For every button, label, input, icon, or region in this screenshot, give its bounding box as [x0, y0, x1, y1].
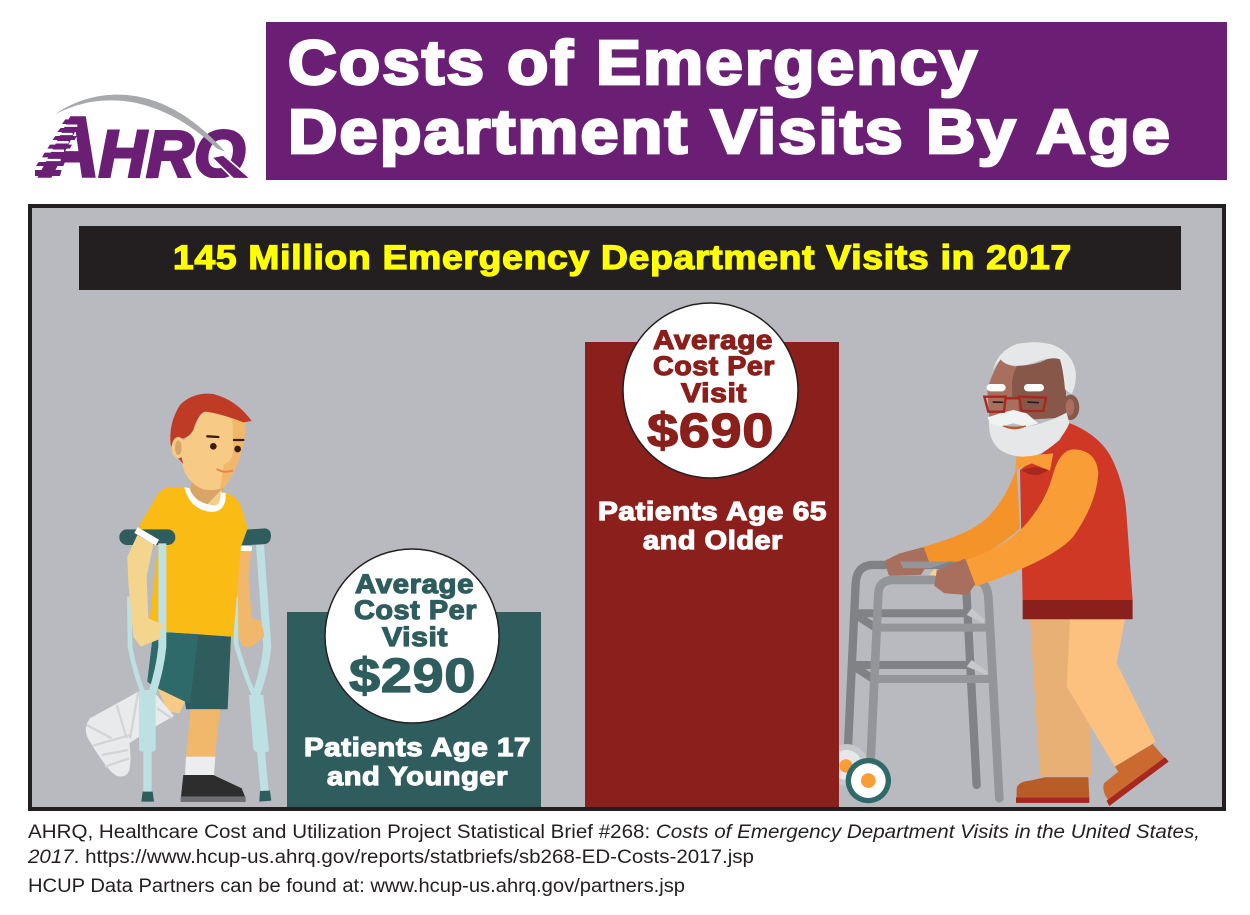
logo: AHRQ: HRQ	[99, 117, 245, 191]
illustration: older man with walker	[826, 342, 1169, 806]
bar: patients age 65 and older: Cost Per	[653, 351, 775, 381]
logo: AHRQ	[33, 95, 260, 196]
source citation: HCUP Data Partners can be found at: www.hcup-us.ahrq.gov/partners.jsp	[28, 876, 685, 897]
title banner	[266, 22, 1227, 180]
source citation: AHRQ, Healthcare Cost and Utilization Project Statistical Brief #268: Costs of Emergency Department Visits in the United States,	[28, 822, 1200, 843]
heading bar: 145 million visits	[79, 226, 1181, 290]
title banner: Department Visits By Age	[288, 98, 1172, 167]
bar: patients age 17 and younger: and Younger	[327, 761, 508, 791]
bar: patients age 17 and younger: Patients Age 17	[304, 732, 531, 762]
bar: patients age 17 and younger	[287, 549, 541, 807]
bar: patients age 17 and younger: Cost Per	[354, 595, 477, 625]
illustration: boy on crutches	[86, 394, 271, 802]
main panel	[30, 206, 1224, 809]
logo: AHRQ: A	[39, 100, 101, 196]
heading bar: 145 million visits: 145 Million Emergency Department Visits in 2017	[173, 239, 1072, 277]
walker: front frame	[871, 580, 999, 798]
bar: patients age 17 and younger: $290	[349, 650, 476, 703]
title banner: Costs of Emergency	[288, 29, 979, 98]
bar: patients age 65 and older: Visit	[681, 378, 747, 408]
source citation	[27, 822, 1200, 897]
bar: patients age 65 and older: Average	[653, 325, 773, 355]
source citation: 2017. https://www.hcup-us.ahrq.gov/reports/statbriefs/sb268-ED-Costs-2017.jsp	[27, 847, 754, 868]
bar: patients age 65 and older: and Older	[643, 525, 783, 555]
bar: patients age 65 and older: Patients Age 65	[598, 496, 827, 526]
bar: patients age 65 and older	[585, 303, 839, 807]
bar: patients age 17 and younger: Average	[355, 569, 474, 599]
walker: back frame	[848, 565, 977, 785]
bar: patients age 17 and younger: Visit	[382, 622, 448, 652]
bar: patients age 65 and older: $690	[647, 405, 774, 458]
